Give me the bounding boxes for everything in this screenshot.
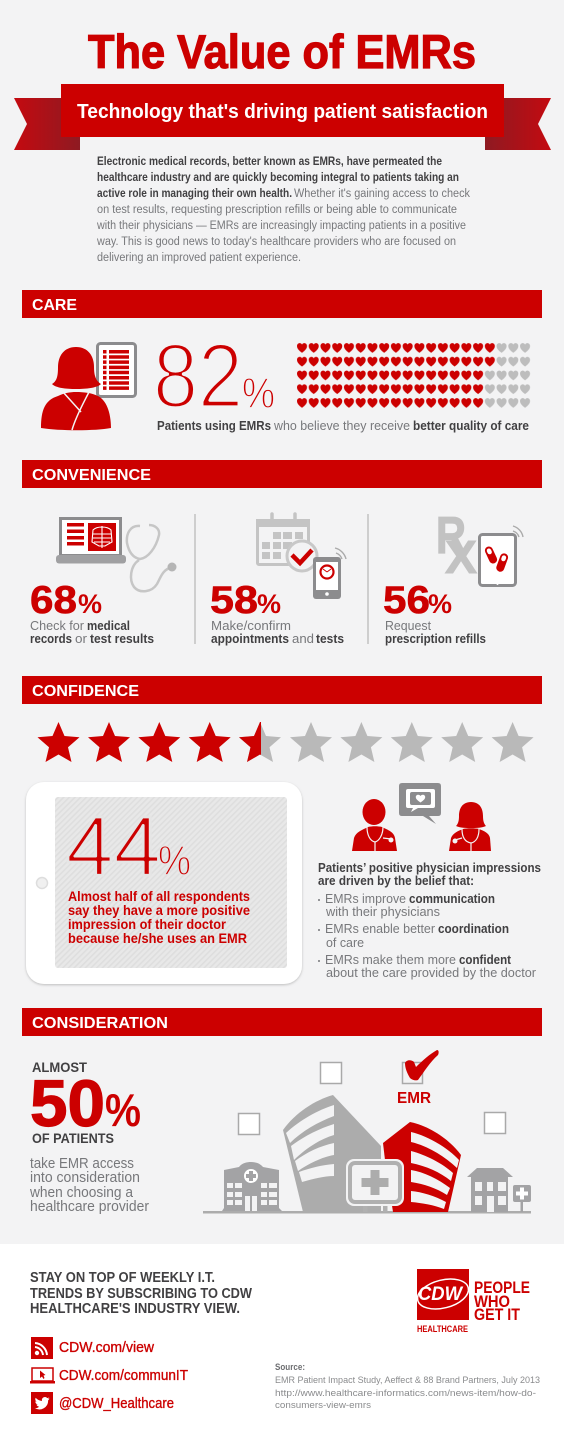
physician impressions text: EMRs improve xyxy=(325,891,406,906)
section header: confidence: CONFIDENCE xyxy=(32,683,139,700)
CDW logo: PEOPLE xyxy=(474,1278,530,1297)
section header: convenience xyxy=(22,460,542,488)
section header: care: CARE xyxy=(32,297,77,314)
physician impressions text: communication xyxy=(409,891,495,906)
tablet statement: say they have a more positive xyxy=(68,902,250,918)
link: communIT: CDW.com/communIT xyxy=(59,1367,188,1384)
tablet statement: because he/she uses an EMR xyxy=(68,930,247,946)
stat: 58 percent: tests xyxy=(316,631,344,646)
icon: prescription tablet: R xyxy=(436,507,466,565)
physician impressions text: EMRs enable better xyxy=(325,921,436,936)
stat: 56 percent: % xyxy=(428,589,452,619)
source note: Source: xyxy=(275,1362,305,1373)
stat: 58 percent: appointments xyxy=(211,631,289,646)
stat: 68 percent xyxy=(30,579,154,646)
building: small clinic xyxy=(222,1162,282,1211)
CDW logo xyxy=(414,1269,530,1335)
panel: tablet with 44 percent: % xyxy=(158,837,191,884)
stat: 44 percent: 44 xyxy=(66,799,161,893)
intro paragraph: with their physicians — EMRs are increasingly impacting patients in a positive xyxy=(96,220,466,232)
consideration text xyxy=(29,1156,149,1215)
checkbox xyxy=(238,1114,260,1134)
intro paragraph: on test results, requesting prescription refills or being able to communicate xyxy=(97,204,457,216)
stat: almost 50 percent of patients: % xyxy=(105,1084,141,1136)
stat: 56 percent: Request xyxy=(385,618,431,633)
physician impressions text: coordination xyxy=(438,921,509,936)
stat: 58 percent: 58 xyxy=(210,579,258,622)
care caption: better quality of care xyxy=(413,418,529,433)
source note: http://www.healthcare-informatics.com/news-item/how-do- xyxy=(275,1388,536,1399)
sign with cross xyxy=(346,1159,404,1212)
stat: almost 50 percent of patients xyxy=(30,1059,141,1146)
link: Twitter xyxy=(31,1392,174,1414)
care caption: who believe they receive xyxy=(273,418,410,433)
physician impressions text: Patients’ positive physician impressions xyxy=(318,860,541,875)
heart chart xyxy=(296,342,531,411)
physician impressions text: of care xyxy=(326,935,364,950)
ribbon banner xyxy=(14,84,551,150)
stat: 56 percent xyxy=(383,579,486,646)
icon: doctors with speech bubble xyxy=(352,783,491,852)
link: RSS xyxy=(31,1337,154,1359)
stat: 68 percent: test results xyxy=(90,631,154,646)
CDW logo: GET IT xyxy=(474,1305,521,1324)
source note: consumers-view-emrs xyxy=(275,1400,371,1411)
intro paragraph: active role in managing their own health. xyxy=(97,188,292,200)
stat: 58 percent: % xyxy=(257,589,281,619)
EMR label: EMR xyxy=(397,1090,431,1107)
physician impressions text xyxy=(318,860,541,980)
source note xyxy=(275,1362,540,1411)
stat: 56 percent: 56 xyxy=(383,579,430,622)
icon: calendar and phone xyxy=(256,514,346,599)
intro paragraph xyxy=(96,156,470,264)
icon: patient with tablet xyxy=(41,344,136,430)
CDW logo: HEALTHCARE xyxy=(417,1324,468,1335)
subscribe heading: TRENDS BY SUBSCRIBING TO CDW xyxy=(30,1286,252,1302)
care caption xyxy=(157,418,529,433)
divider xyxy=(194,514,196,644)
physician impressions text: are driven by the belief that: xyxy=(318,873,474,888)
consideration text: when choosing a xyxy=(29,1185,134,1201)
ground line xyxy=(203,1211,531,1214)
CDW logo: CDW xyxy=(418,1284,464,1305)
consideration text: healthcare provider xyxy=(30,1199,149,1215)
stat: 68 percent: Check for xyxy=(30,618,85,633)
intro paragraph: Whether it's gaining access to check xyxy=(294,188,470,200)
illustration: healthcare buildings xyxy=(203,1050,531,1214)
icon: prescription tablet: X xyxy=(445,531,477,583)
section header: confidence xyxy=(22,676,542,704)
stat: almost 50 percent of patients: ALMOST xyxy=(32,1059,87,1075)
section header: consideration xyxy=(22,1008,542,1036)
tablet statement: Almost half of all respondents xyxy=(68,888,250,904)
intro paragraph: delivering an improved patient experience. xyxy=(97,252,301,264)
physician impressions text: confident xyxy=(459,952,512,967)
physician impressions text: about the care provided by the doctor xyxy=(326,965,537,980)
source note: EMR Patient Impact Study, Aeffect & 88 Brand Partners, July 2013 xyxy=(275,1375,540,1386)
care caption: Patients using EMRs xyxy=(157,418,271,433)
section header: care xyxy=(22,290,542,318)
stat: 68 percent: % xyxy=(78,589,102,619)
tablet statement: impression of their doctor xyxy=(68,916,226,932)
link: Twitter: @CDW_Healthcare xyxy=(59,1395,174,1412)
physician impressions text: with their physicians xyxy=(325,904,440,919)
stat: 58 percent: Make/confirm xyxy=(211,618,291,633)
stat: 68 percent: 68 xyxy=(30,579,77,622)
icon: prescription tablet xyxy=(436,507,523,586)
stat: 82 percent: % xyxy=(242,370,275,418)
stat: 82 percent: 82 xyxy=(153,326,243,427)
stat: 68 percent: records xyxy=(30,631,72,646)
checkbox checked with EMR label xyxy=(397,1050,439,1107)
stat: almost 50 percent of patients: OF PATIENTS xyxy=(32,1130,114,1146)
checkbox xyxy=(320,1062,342,1084)
subscribe heading: HEALTHCARE'S INDUSTRY VIEW. xyxy=(30,1301,240,1317)
star rating xyxy=(38,722,534,762)
tablet statement xyxy=(68,888,250,946)
section header: consideration: CONSIDERATION xyxy=(32,1015,168,1032)
checkbox xyxy=(484,1112,506,1134)
link: RSS: CDW.com/view xyxy=(59,1339,154,1356)
building: tall gray tower xyxy=(283,1095,381,1212)
stat: 68 percent: medical xyxy=(87,618,130,633)
subscribe heading: STAY ON TOP OF WEEKLY I.T. xyxy=(30,1270,215,1286)
footer background xyxy=(0,1244,564,1445)
consideration text: take EMR access xyxy=(30,1156,134,1172)
physician impressions text: EMRs make them more xyxy=(325,952,456,967)
stat: 58 percent xyxy=(210,579,344,646)
divider xyxy=(368,514,369,644)
title: The Value of EMRs xyxy=(88,25,476,78)
building: small house and sign xyxy=(467,1168,531,1212)
intro paragraph: Electronic medical records, better known as EMRs, have permeated the xyxy=(97,156,442,168)
intro paragraph: way. This is good news to today's healthcare providers who are focused on xyxy=(96,236,456,248)
stat: 56 percent: prescription refills xyxy=(385,631,486,646)
panel: tablet with 44 percent xyxy=(26,782,302,984)
CDW logo: WHO xyxy=(474,1292,510,1311)
building: red EMR hospital xyxy=(383,1122,461,1212)
stat: almost 50 percent of patients: 50 xyxy=(30,1066,105,1140)
subscribe heading xyxy=(30,1270,252,1317)
subtitle: Technology that's driving patient satisfaction xyxy=(77,101,488,123)
icon: laptop and stethoscope xyxy=(56,518,176,591)
section header: convenience: CONVENIENCE xyxy=(32,467,151,484)
stat: 58 percent: and xyxy=(292,631,314,646)
consideration text: into consideration xyxy=(30,1170,140,1186)
stat: 68 percent: or xyxy=(75,631,88,646)
intro paragraph: healthcare industry and are quickly becoming integral to patients taking an xyxy=(97,172,459,184)
